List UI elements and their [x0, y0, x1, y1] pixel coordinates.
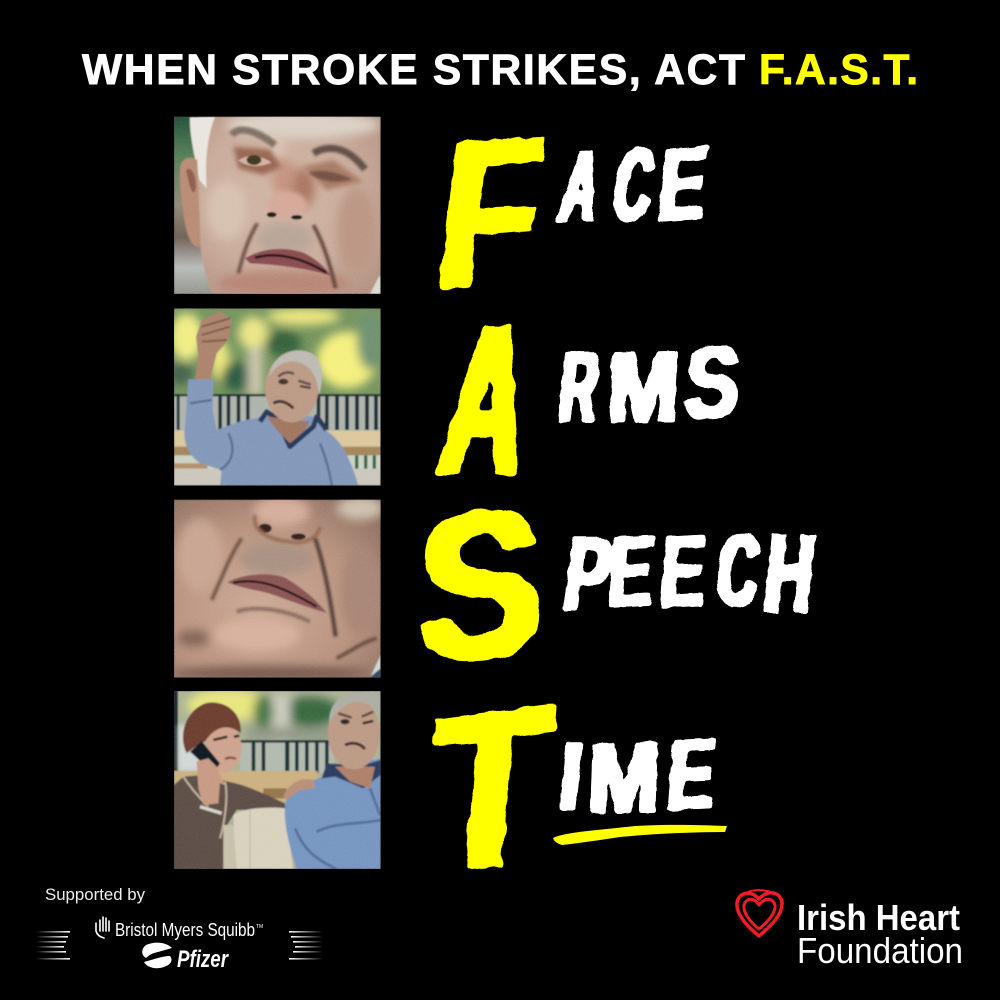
photo: man raising arm: [167, 308, 383, 486]
Speech word: H: [759, 510, 820, 636]
F initial: F: [426, 92, 553, 336]
sponsor stripes left: [36, 931, 70, 960]
Speech word: E: [604, 515, 658, 629]
logo: heart icon: [737, 890, 782, 936]
Time word: M: [586, 722, 662, 834]
logo: Irish Heart Foundation: Foundation: [797, 930, 963, 971]
Speech word: [558, 510, 820, 636]
Time word: E: [663, 717, 720, 832]
logo: Pfizer: Pfizer: [177, 946, 229, 973]
title: WHEN STROKE STRIKES, ACT: [82, 47, 745, 94]
Time word: I: [556, 722, 587, 831]
logo: Bristol Myers Squibb: TM: [256, 924, 263, 930]
Face word: C: [606, 127, 661, 244]
logo: Bristol Myers Squibb: Bristol Myers Squibb: [115, 920, 255, 940]
Arms word: [555, 324, 742, 445]
S initial: S: [418, 463, 543, 709]
Arms word: R: [555, 331, 604, 445]
Speech word: P: [558, 515, 618, 633]
photo: woman phoning beside man: [174, 688, 381, 869]
Face word: E: [654, 125, 712, 243]
supported by label: Supported by: [45, 885, 145, 904]
Face word: A: [553, 130, 608, 245]
photo: drooping mouth close-up: [170, 497, 383, 681]
sponsor stripes right: [289, 931, 323, 960]
underline brush: [553, 825, 727, 845]
Face word: [553, 125, 712, 245]
logo: Irish Heart Foundation: Irish Heart: [797, 897, 960, 938]
Arms word: M: [605, 330, 682, 443]
Arms word: S: [683, 324, 742, 442]
Speech word: C: [712, 512, 764, 628]
Time word: [556, 717, 720, 834]
logo: Irish Heart Foundation: [797, 897, 963, 971]
T initial: T: [420, 656, 560, 922]
logo: Pfizer: [142, 943, 229, 973]
photo: drooping face: [174, 112, 381, 297]
A initial: A: [430, 280, 544, 520]
title: F.A.S.T.: [759, 47, 918, 94]
Speech word: E: [656, 515, 710, 629]
